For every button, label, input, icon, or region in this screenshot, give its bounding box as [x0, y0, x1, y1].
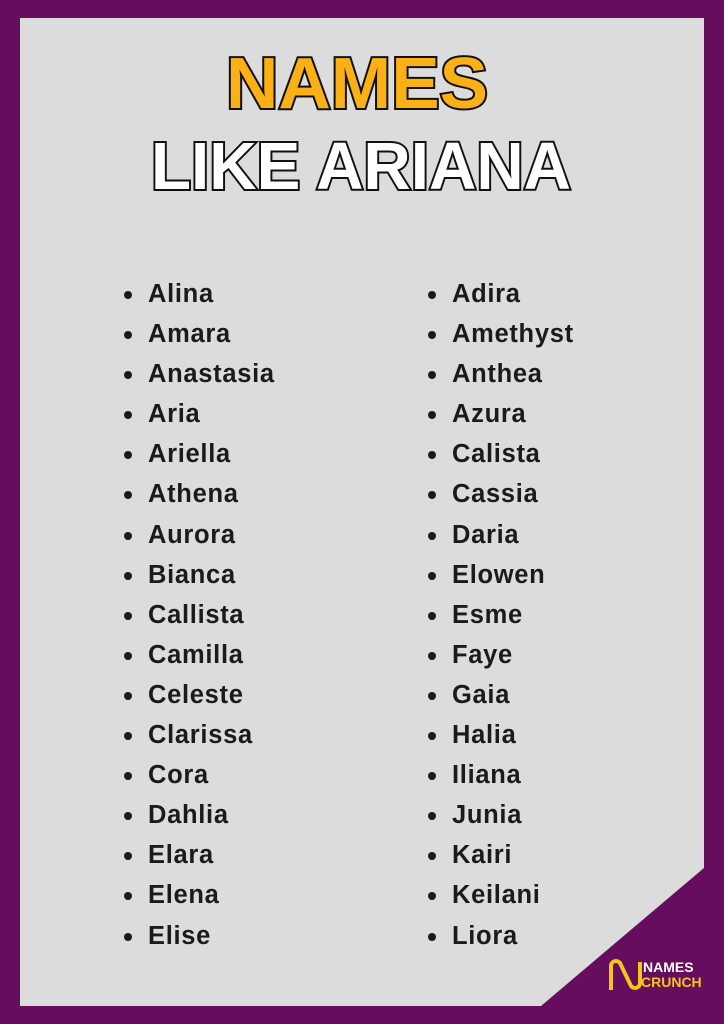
list: left column: Camilla [148, 641, 244, 669]
list: left column: Athena [148, 480, 239, 508]
list: right column: Anthea [452, 360, 543, 388]
list: left column: Elara [148, 841, 214, 869]
list: right column: Junia [452, 801, 522, 829]
logo: names crunch [609, 959, 702, 990]
list: left column: Amara [148, 320, 231, 348]
list: right column: Adira [452, 280, 521, 308]
list: right column [428, 280, 574, 950]
list: left column: Aurora [148, 521, 236, 549]
list: left column: Ariella [148, 440, 231, 468]
logo: names crunch: NAMES [643, 959, 694, 975]
title: NAMES [226, 44, 488, 124]
list: right column: Daria [452, 521, 519, 549]
list: left column: Clarissa [148, 721, 253, 749]
list: right column: Gaia [452, 681, 510, 709]
title: LIKE ARIANA [151, 129, 571, 204]
list: left column: Bianca [148, 561, 236, 589]
title [151, 44, 572, 204]
list: left column: Elena [148, 881, 220, 909]
list: left column: Aria [148, 400, 200, 428]
list: left column: Elise [148, 922, 211, 950]
list: left column: Cora [148, 761, 209, 789]
list: left column: Celeste [148, 681, 244, 709]
list: left column [124, 280, 275, 950]
list: right column: Calista [452, 440, 541, 468]
list: right column: Faye [452, 641, 513, 669]
list: right column: Azura [452, 400, 526, 428]
list: right column: Halia [452, 721, 516, 749]
list: right column: Amethyst [452, 320, 574, 348]
logo: names crunch: CRUNCH [641, 974, 702, 990]
list: left column: Anastasia [148, 360, 275, 388]
list: left column: Dahlia [148, 801, 229, 829]
list: right column: Cassia [452, 480, 538, 508]
list: right column: Esme [452, 601, 523, 629]
list: right column: Iliana [452, 761, 521, 789]
list: right column: Elowen [452, 561, 545, 589]
list: left column: Callista [148, 601, 244, 629]
list: right column: Kairi [452, 841, 512, 869]
list: left column: Alina [148, 280, 214, 308]
list: right column: Keilani [452, 881, 541, 909]
list: right column: Liora [452, 922, 518, 950]
